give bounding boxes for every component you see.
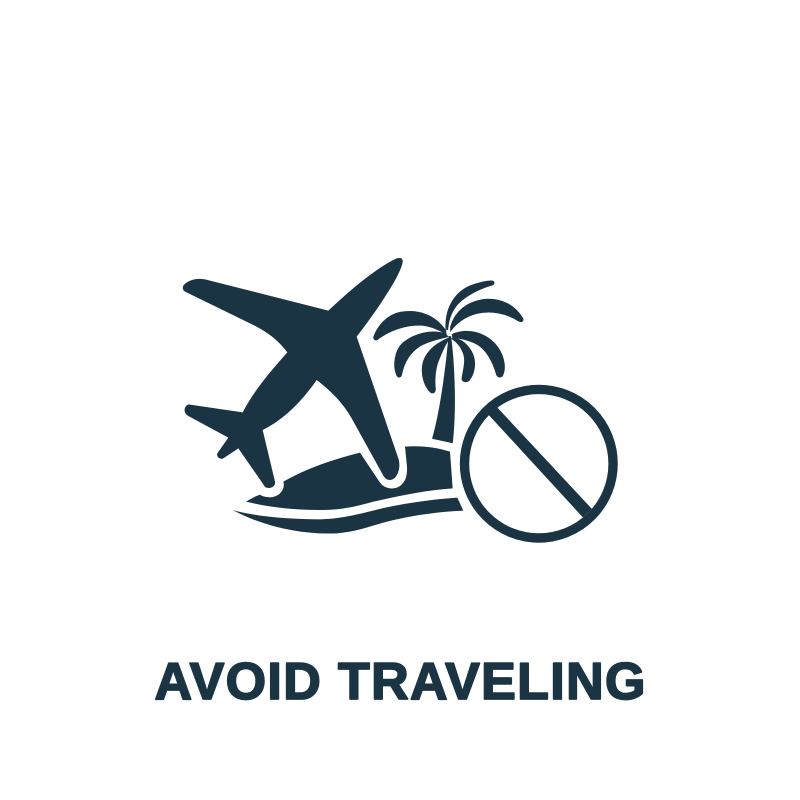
palm frond middle right <box>452 331 504 377</box>
icon: airplane <box>183 258 403 488</box>
palm frond upper left <box>374 312 446 340</box>
prohibition slash <box>486 404 592 518</box>
prohibition ring <box>464 389 613 538</box>
palm frond upper right <box>451 299 523 331</box>
title: AVOID TRAVELING <box>154 653 646 711</box>
palm trunk <box>433 337 454 443</box>
wave <box>233 498 463 534</box>
icon: prohibition sign <box>464 389 613 538</box>
palm frond top <box>446 281 494 329</box>
icon: palm tree <box>374 281 523 443</box>
palm frond middle left <box>395 332 448 377</box>
island <box>246 446 453 510</box>
palm frond lower left <box>422 338 449 393</box>
palm frond lower right <box>452 338 475 382</box>
icon: island and wave <box>233 446 463 534</box>
icon: avoid traveling <box>183 258 613 538</box>
